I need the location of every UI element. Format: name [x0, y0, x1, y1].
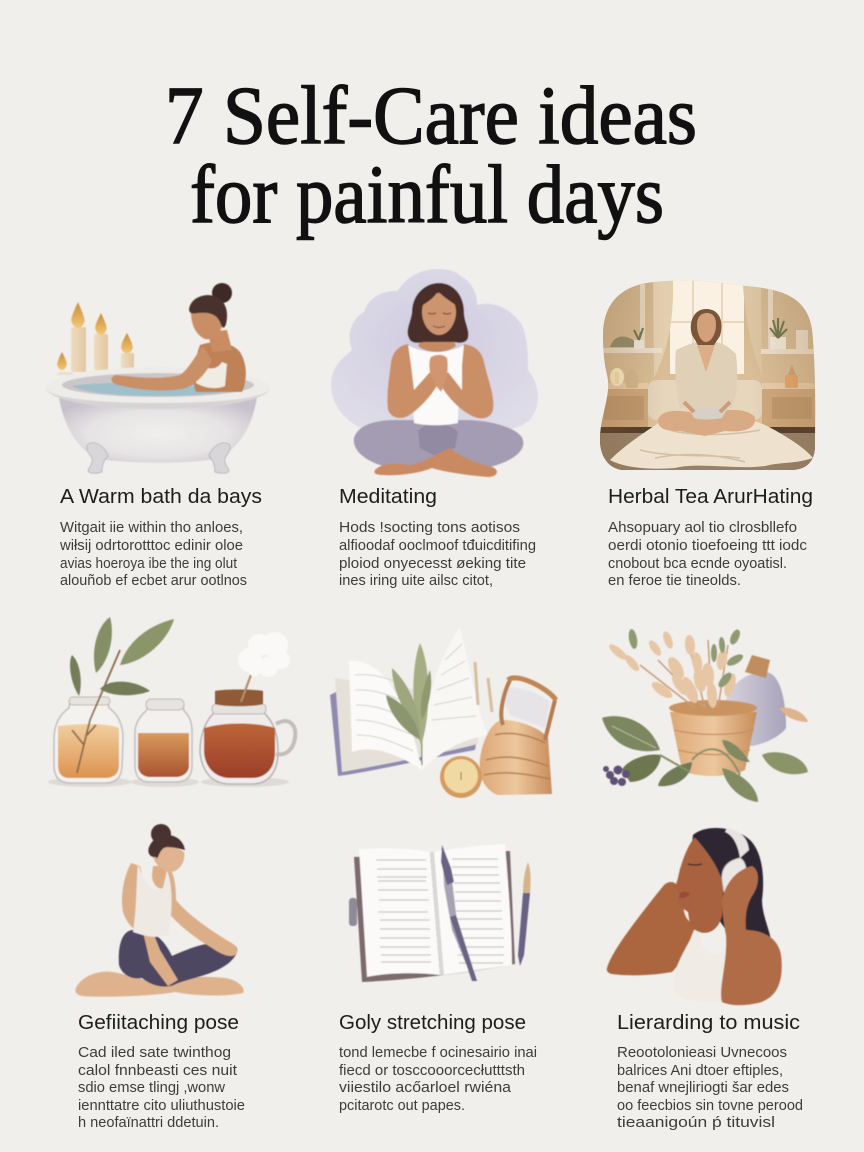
text: meditating: ploiod onyecesst øeking tite — [339, 556, 526, 572]
panel: journal — [339, 844, 537, 1114]
text: warm bath — [59, 520, 247, 589]
text: warm bath: alouñob ef ecbet arur ootlnos — [60, 573, 247, 589]
illustration: potted dried plant and kettle — [602, 628, 808, 802]
text: pose: calol fnnbeasti ces nuit — [78, 1063, 237, 1079]
text: journal: pcitarotc out papes. — [339, 1098, 465, 1114]
panel: listening to music — [607, 828, 803, 1131]
text: herbal tea — [608, 520, 807, 589]
text: pose: sdio emse tlingj ,wonw — [78, 1080, 226, 1096]
text: herbal tea: oerdi otonio tioefoeing ttt iodc — [608, 538, 807, 554]
text: journal: fiecd or tosccooorcecłutttsth — [339, 1063, 525, 1079]
text: meditating: Hods !socting tons aotisos — [339, 520, 520, 536]
panel: meditating — [331, 269, 538, 589]
text: journal: tond lemecbe f ocinesairio inai — [339, 1045, 537, 1061]
title — [165, 69, 697, 240]
heading: herbal tea: Herbal Tea ArurHating — [608, 485, 813, 508]
photo: woman reading on bed — [600, 280, 816, 472]
title: for painful days — [190, 148, 664, 240]
panel: warm bath — [46, 283, 270, 589]
text: music: Reootolonieasi Uvnecoos — [617, 1045, 787, 1061]
text: journal: viiestilo acőarloel rwiéna — [339, 1080, 511, 1096]
illustration: woman in seated pose — [75, 824, 244, 997]
icon: meditating woman on lavender cloud — [331, 269, 538, 477]
text: warm bath: avias hoeroya ibe the ing olut — [60, 556, 237, 572]
panel: herbal tea photo — [600, 280, 816, 589]
heading: pose: Gefiitaching pose — [78, 1011, 239, 1034]
text: pose: h neofaïnattri ddetuin. — [78, 1115, 219, 1131]
text: warm bath: wiłsij odrtorotttoc edinir oloe — [59, 538, 243, 554]
title: 7 Self-Care ideas — [165, 69, 697, 161]
heading: meditating: Meditating — [339, 485, 437, 508]
text: pose: iennttatre cito uliuthustoie — [78, 1098, 245, 1114]
panel: sitting pose — [75, 824, 245, 1131]
text: pose — [78, 1045, 245, 1131]
text: music: balrices Ani dtoer eftiples, — [617, 1063, 783, 1079]
text: music: benaf wnejliriogti šar edes — [617, 1080, 789, 1096]
text: warm bath: Witgait iie within tho anloes, — [60, 520, 243, 536]
text: herbal tea: cnobout bca ecnde oyoatisl. — [608, 556, 787, 572]
text: herbal tea: Ahsopuary aol tio clrosbllefo — [608, 520, 797, 536]
text: music — [617, 1045, 803, 1131]
text: meditating — [339, 520, 536, 589]
text: music: oo feecbios sin tovne perood — [617, 1098, 803, 1114]
text: meditating: alfioodaf ooclmoof tđuicditifing — [339, 538, 536, 554]
text: pose: Cad iled sate twinthog — [78, 1045, 231, 1061]
text: music: tieaanigoún ṕ tituvisl — [617, 1115, 775, 1131]
heading: music: Lierarding to music — [617, 1011, 800, 1034]
illustration: open book and herbs — [330, 627, 556, 798]
text: journal — [339, 1045, 537, 1114]
heading: journal: Goly stretching pose — [339, 1011, 526, 1034]
illustration: herbal jars — [48, 617, 295, 787]
text: herbal tea: en feroe tie tineolds. — [608, 573, 741, 589]
illustration: woman with headphones — [607, 828, 782, 1005]
heading: warm bath: A Warm bath da bays — [60, 485, 262, 508]
illustration: open notebook and pens — [349, 844, 531, 982]
text: meditating: ines iring uite ailsc citot, — [339, 573, 493, 589]
icon: bathtub with candles and woman — [46, 283, 270, 473]
